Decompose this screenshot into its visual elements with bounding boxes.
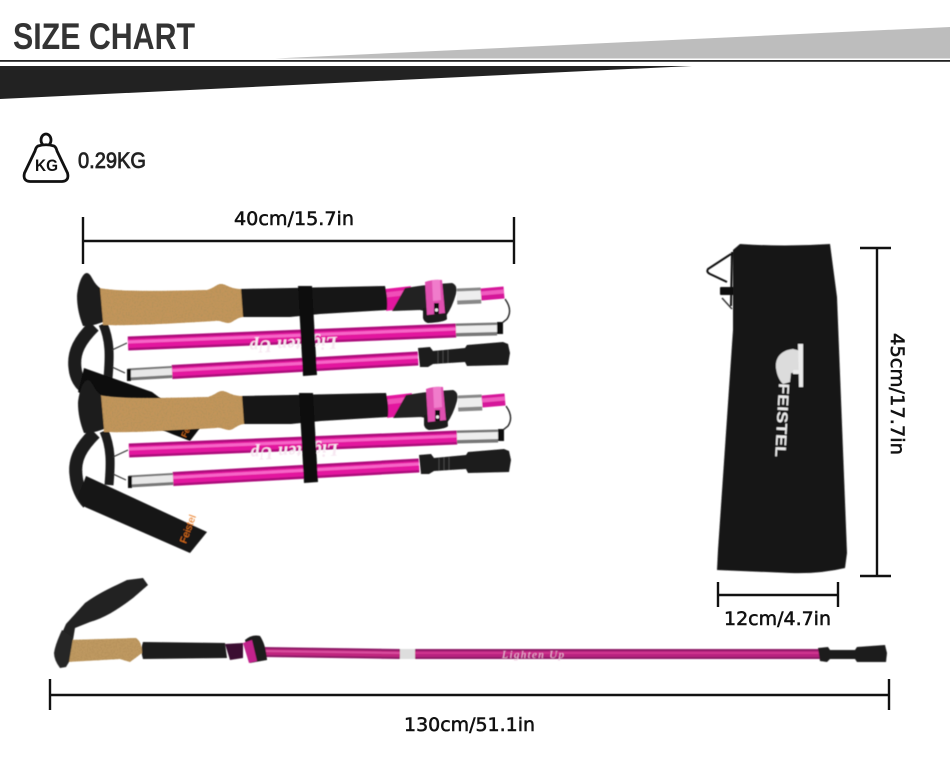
dimension: extended length: 130cm/51.1in bbox=[404, 714, 535, 736]
upper tube and lock bbox=[385, 280, 504, 323]
handle cap bbox=[77, 273, 103, 326]
black tip bbox=[418, 342, 510, 367]
cork grip bbox=[99, 284, 243, 325]
velcro band bbox=[298, 286, 317, 376]
upper tube and lock bbox=[386, 387, 505, 430]
bag body bbox=[717, 244, 847, 573]
wrist strap: Fei bbox=[180, 425, 193, 439]
icon: kg weight: KG bbox=[35, 156, 58, 175]
folded pole: lower bbox=[76, 380, 511, 553]
lock clamp bbox=[225, 636, 267, 663]
dimension: bag width: 12cm/4.7in bbox=[724, 608, 831, 630]
handle cap bbox=[78, 380, 104, 433]
logo wordmark: FEISTEL bbox=[771, 383, 792, 458]
weight value: 0.29KG bbox=[78, 148, 146, 173]
handle cap bbox=[54, 630, 73, 668]
foam grip bbox=[240, 286, 387, 317]
wrist strap: Feistel bbox=[178, 514, 199, 545]
carry bag bbox=[707, 244, 847, 573]
dimension: bag height: 45cm/17.7in bbox=[886, 333, 908, 455]
middle tube: Lighten Up bbox=[249, 333, 339, 357]
wrist strap bbox=[76, 431, 207, 553]
dimension: folded length: 40cm/15.7in bbox=[234, 208, 354, 230]
grey wedge bbox=[275, 27, 950, 58]
header band bbox=[0, 27, 950, 99]
shaft bbox=[263, 649, 820, 661]
extended pole bbox=[54, 578, 887, 668]
header rule bbox=[0, 60, 950, 62]
wrist strap bbox=[75, 324, 200, 441]
shaft: Lighten Up bbox=[501, 649, 564, 661]
foam grip bbox=[142, 642, 227, 659]
drawcord and toggle bbox=[707, 252, 734, 309]
middle tube bbox=[112, 299, 510, 357]
dimension: bag width bbox=[718, 582, 838, 630]
rubber tip bbox=[818, 645, 887, 662]
middle tube: Lighten Up bbox=[250, 440, 340, 464]
lower tube bbox=[113, 464, 419, 482]
middle tube bbox=[113, 406, 511, 464]
foam grip bbox=[241, 393, 388, 424]
velcro band bbox=[299, 393, 318, 483]
dimension: bag height bbox=[860, 248, 908, 576]
lower tube bbox=[112, 357, 418, 375]
black wedge bbox=[0, 66, 692, 99]
cork grip bbox=[100, 391, 244, 432]
cork grip bbox=[67, 638, 142, 662]
folded pole: upper bbox=[75, 273, 510, 441]
dimension: folded length bbox=[83, 208, 514, 264]
title: SIZE CHART bbox=[13, 16, 195, 57]
wrist strap bbox=[62, 578, 148, 640]
black tip bbox=[419, 449, 511, 474]
weight block bbox=[24, 134, 146, 182]
logo mark bbox=[776, 344, 803, 387]
dimension: extended length bbox=[50, 679, 889, 736]
